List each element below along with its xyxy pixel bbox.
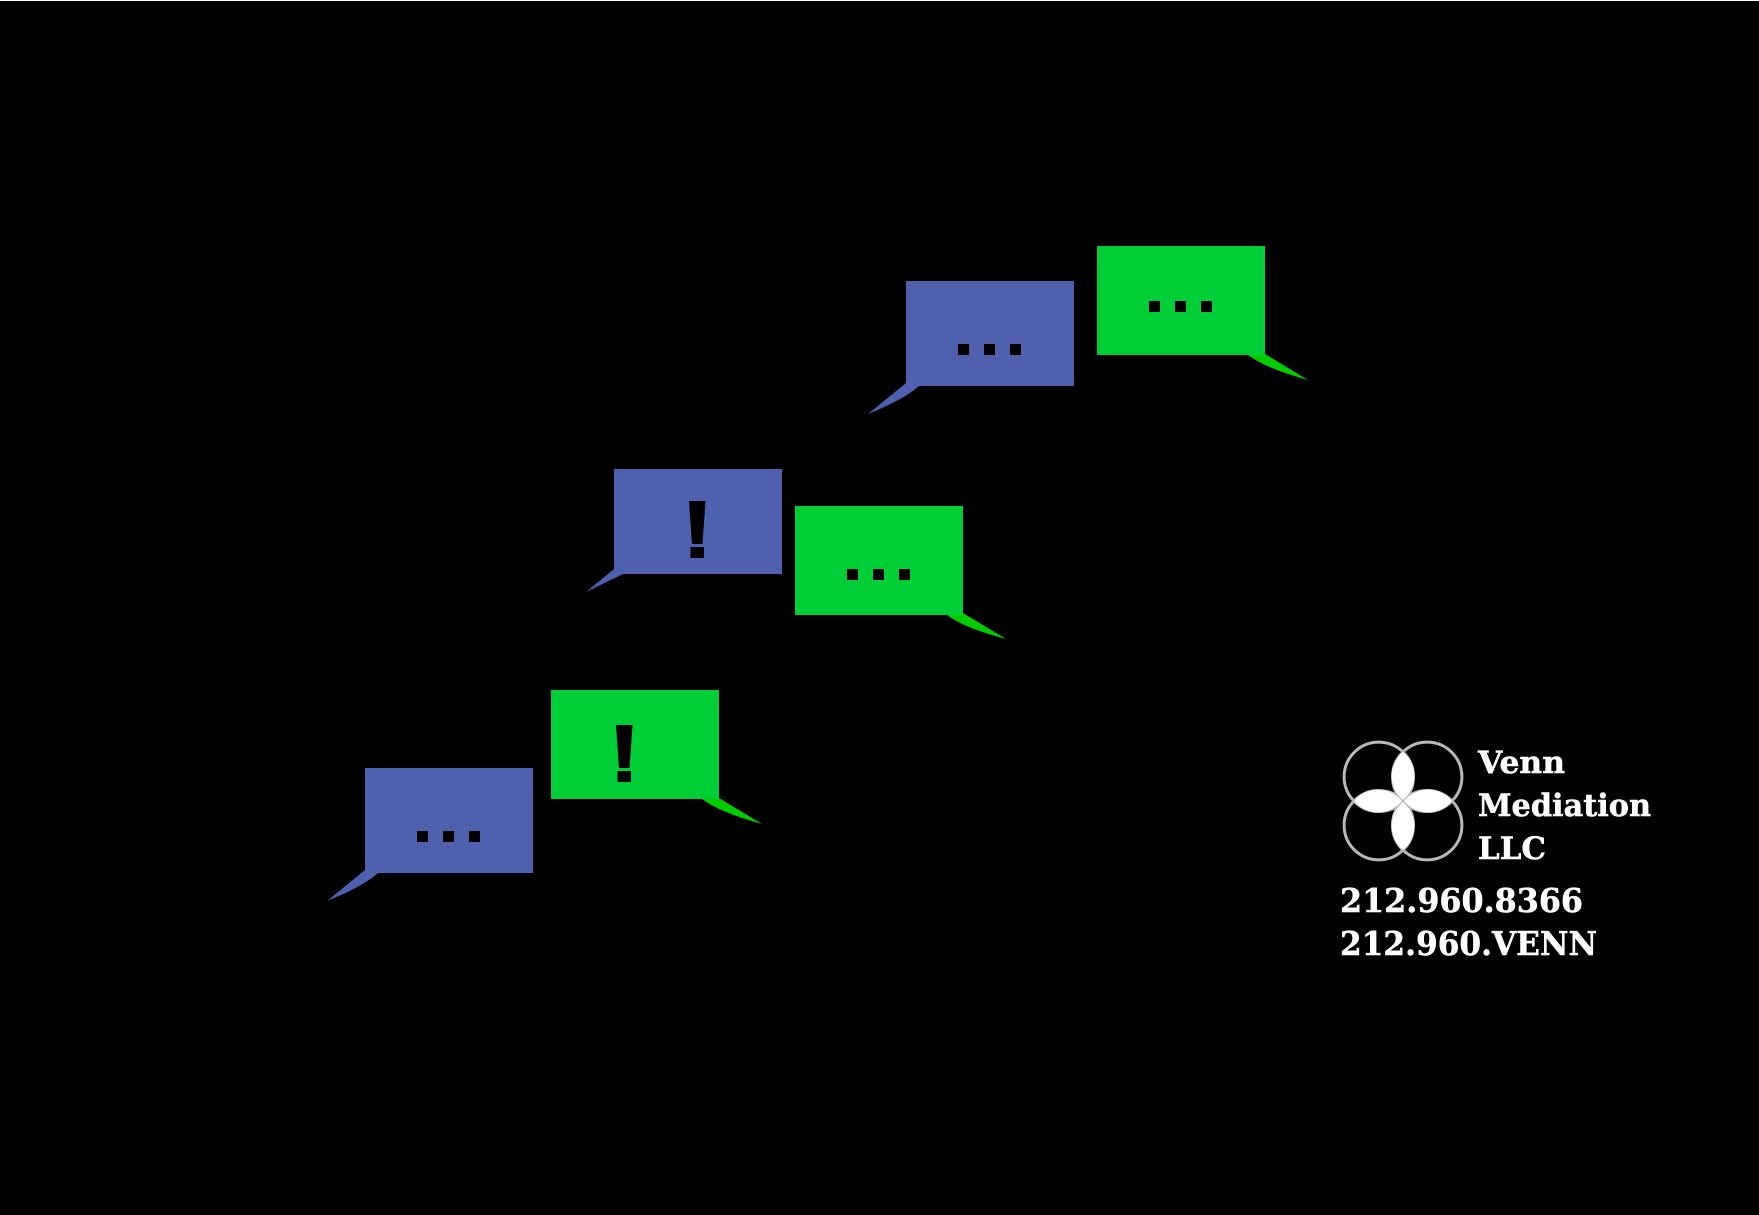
- company name: [1477, 745, 1651, 867]
- speech bubble: green ellipsis, top pair: [1097, 246, 1308, 380]
- speech bubble: blue exclamation, middle pair: [586, 469, 782, 592]
- speech bubble: green ellipsis, middle pair: [795, 506, 1006, 639]
- phone numbers: [1340, 881, 1597, 963]
- company name: Venn: [1477, 745, 1565, 781]
- company name: Mediation: [1478, 788, 1651, 824]
- company name: LLC: [1478, 831, 1546, 867]
- phone numbers: 212.960.8366: [1340, 881, 1583, 920]
- phone numbers: 212.960.VENN: [1340, 924, 1597, 963]
- logo: four overlapping circles with white petals: [1344, 742, 1462, 860]
- speech bubble: blue ellipsis, lower pair: [327, 768, 533, 901]
- speech bubble: green exclamation, lower pair: [551, 690, 762, 824]
- speech bubble: blue ellipsis, top pair: [868, 281, 1074, 414]
